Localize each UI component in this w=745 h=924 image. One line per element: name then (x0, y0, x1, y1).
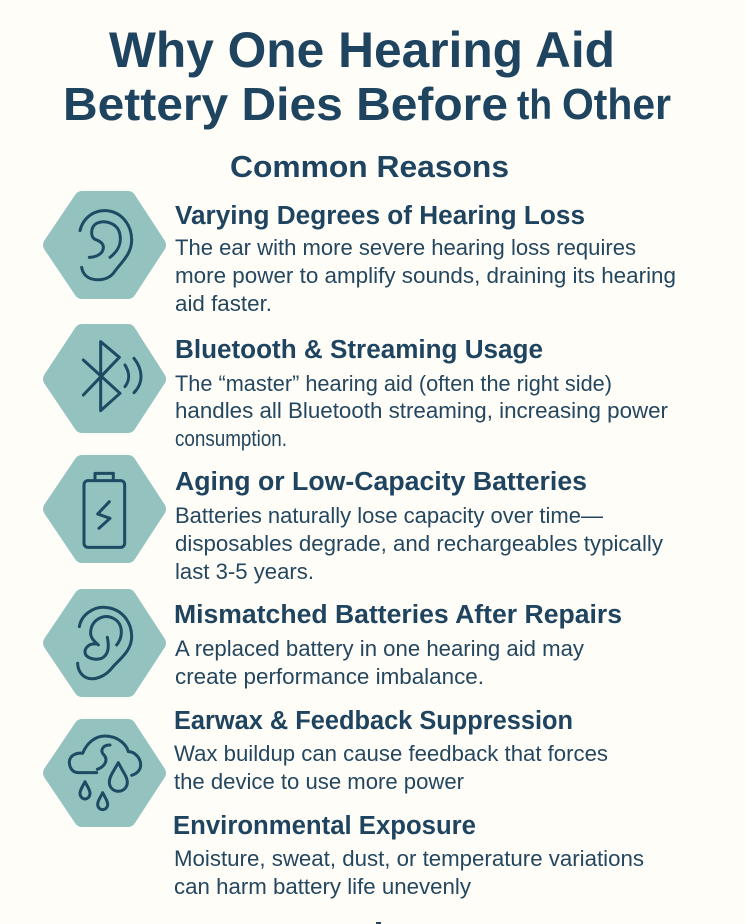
description (175, 636, 584, 689)
description (174, 741, 608, 794)
description: Batteries naturally lose capacity over time— (175, 503, 603, 528)
description: Moisture, sweat, dust, or temperature variations (174, 846, 644, 871)
heading: Aging or Low-Capacity Batteries (175, 468, 587, 496)
icon: bluetooth with sound waves (83, 342, 141, 411)
description: create performance imbalance. (175, 664, 484, 689)
description: the device to use more power (174, 769, 464, 794)
description: A replaced battery in one hearing aid may (175, 636, 584, 661)
panel: earwax and feedback suppression (51, 707, 608, 819)
description: aid faster. (175, 291, 272, 316)
icon: ear (80, 211, 132, 280)
description: last 3-5 years. (175, 559, 314, 584)
hexagon badge (51, 597, 158, 689)
title: Why One Hearing Aid (109, 22, 615, 78)
description: Wax buildup can cause feedback that forces (174, 741, 608, 766)
heading: common reasons: Common Reasons (230, 149, 509, 184)
heading: Environmental Exposure (173, 812, 476, 840)
panel: varying degrees of hearing loss (51, 199, 676, 316)
icon: ear (78, 607, 132, 679)
title: Bettery Dies Before (63, 78, 508, 130)
icon: battery with bolt (84, 473, 125, 547)
description: more power to amplify sounds, draining its hearing (175, 263, 676, 288)
description: The ear with more severe hearing loss requires (175, 235, 636, 260)
description (175, 503, 663, 584)
heading: Mismatched Batteries After Repairs (174, 601, 622, 629)
description (175, 371, 668, 451)
panel: bluetooth and streaming usage (51, 332, 668, 451)
description: can harm battery life unevenly (174, 874, 471, 899)
hexagon badge (51, 727, 158, 819)
heading: Varying Degrees of Hearing Loss (175, 202, 585, 230)
description: consumption. (175, 426, 287, 451)
description: disposables degrade, and rechargeables typically (175, 531, 663, 556)
description (174, 846, 644, 899)
icon: cloud with drops (69, 736, 141, 810)
panel: environmental exposure (173, 812, 644, 899)
panel: mismatched batteries after repairs (51, 597, 622, 689)
panel: aging or low-capacity batteries (51, 463, 663, 584)
title: th (517, 81, 552, 128)
heading: Earwax & Feedback Suppression (174, 707, 573, 735)
hexagon badge (51, 332, 158, 425)
description: The “master” hearing aid (often the right side) (175, 371, 612, 396)
description: handles all Bluetooth streaming, increasing power (175, 398, 668, 423)
heading: Bluetooth & Streaming Usage (175, 336, 543, 364)
hexagon badge (51, 199, 158, 291)
description (175, 235, 676, 316)
title (63, 22, 671, 130)
hexagon badge (51, 463, 158, 555)
title: Other (562, 80, 671, 129)
